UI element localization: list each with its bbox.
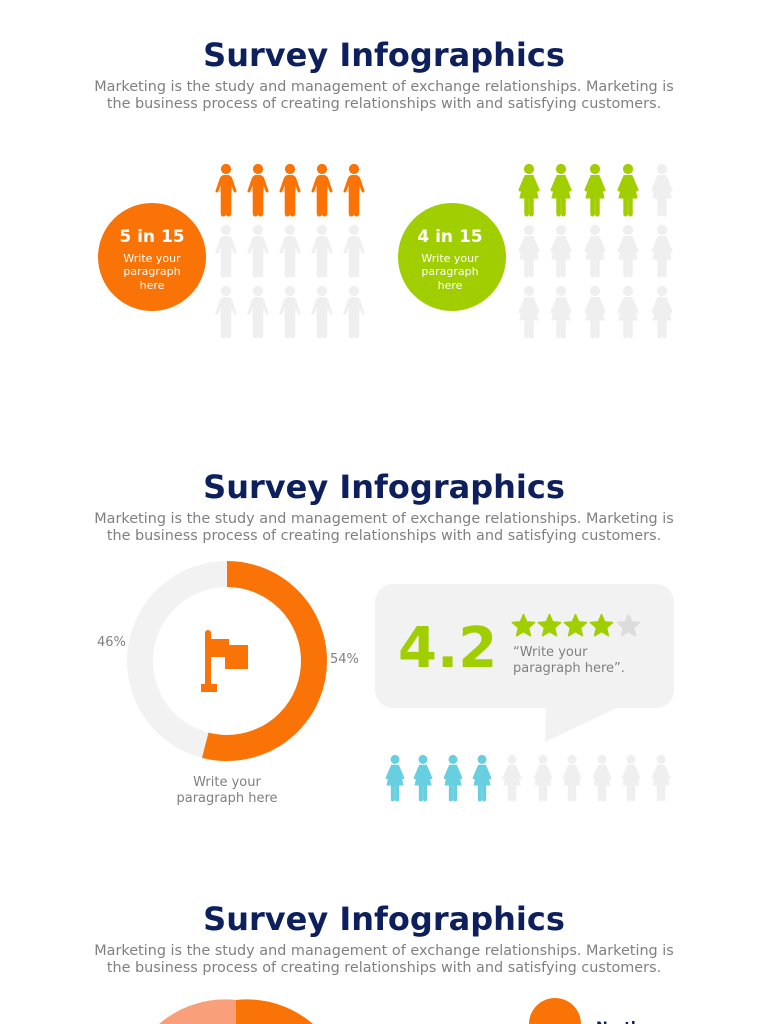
stat circle: 5 in 15: paragraph <box>123 265 181 278</box>
stat circle: 4 in 15: Write your <box>421 252 479 265</box>
legend item <box>529 998 641 1024</box>
subtitle: section 2: the business process of creating relationships with and satisfying customers. <box>107 528 661 544</box>
subtitle: section 2: Marketing is the study and management of exchange relationships. Marketing is <box>94 511 674 527</box>
donut chart: 46% <box>97 635 126 650</box>
subtitle: section 1: the business process of creating relationships with and satisfying customers. <box>107 96 661 112</box>
stat circle: 5 in 15: Write your <box>123 252 181 265</box>
speech bubble: rating: paragraph here”. <box>513 661 625 676</box>
icon: flag <box>201 630 248 692</box>
stat circle: 4 in 15: 4 in 15 <box>417 227 483 247</box>
speech bubble: rating: “Write your <box>513 645 588 660</box>
stat circle: 4 in 15: here <box>438 279 463 292</box>
subtitle: section 1: Marketing is the study and management of exchange relationships. Marketing is <box>94 79 674 95</box>
title: section 3: Survey Infographics <box>203 900 565 938</box>
people row: women <box>387 755 669 801</box>
stat circle: 5 in 15: here <box>140 279 165 292</box>
subtitle: section 3: Marketing is the study and management of exchange relationships. Marketing is <box>94 943 674 959</box>
speech bubble: rating: 4.2 <box>398 616 497 681</box>
donut chart: Write your <box>193 775 261 790</box>
subtitle: section 2 <box>94 511 674 544</box>
stars <box>512 615 640 636</box>
subtitle: section 3 <box>94 943 674 976</box>
donut chart: 54% <box>330 652 359 667</box>
speech bubble: rating <box>375 584 674 742</box>
pie chart <box>159 999 313 1024</box>
donut chart: paragraph here <box>176 791 278 806</box>
title: section 2: Survey Infographics <box>203 468 565 506</box>
title: section 1: Survey Infographics <box>203 36 565 74</box>
donut chart <box>97 574 359 806</box>
people grid: women <box>520 164 671 338</box>
subtitle: section 1 <box>94 79 674 112</box>
subtitle: section 3: the business process of creating relationships with and satisfying customers. <box>107 960 661 976</box>
people grid: men <box>217 164 363 338</box>
stat circle: 4 in 15 <box>398 203 506 311</box>
stat circle: 5 in 15: 5 in 15 <box>119 227 185 247</box>
stat circle: 4 in 15: paragraph <box>421 265 479 278</box>
stat circle: 5 in 15 <box>98 203 206 311</box>
